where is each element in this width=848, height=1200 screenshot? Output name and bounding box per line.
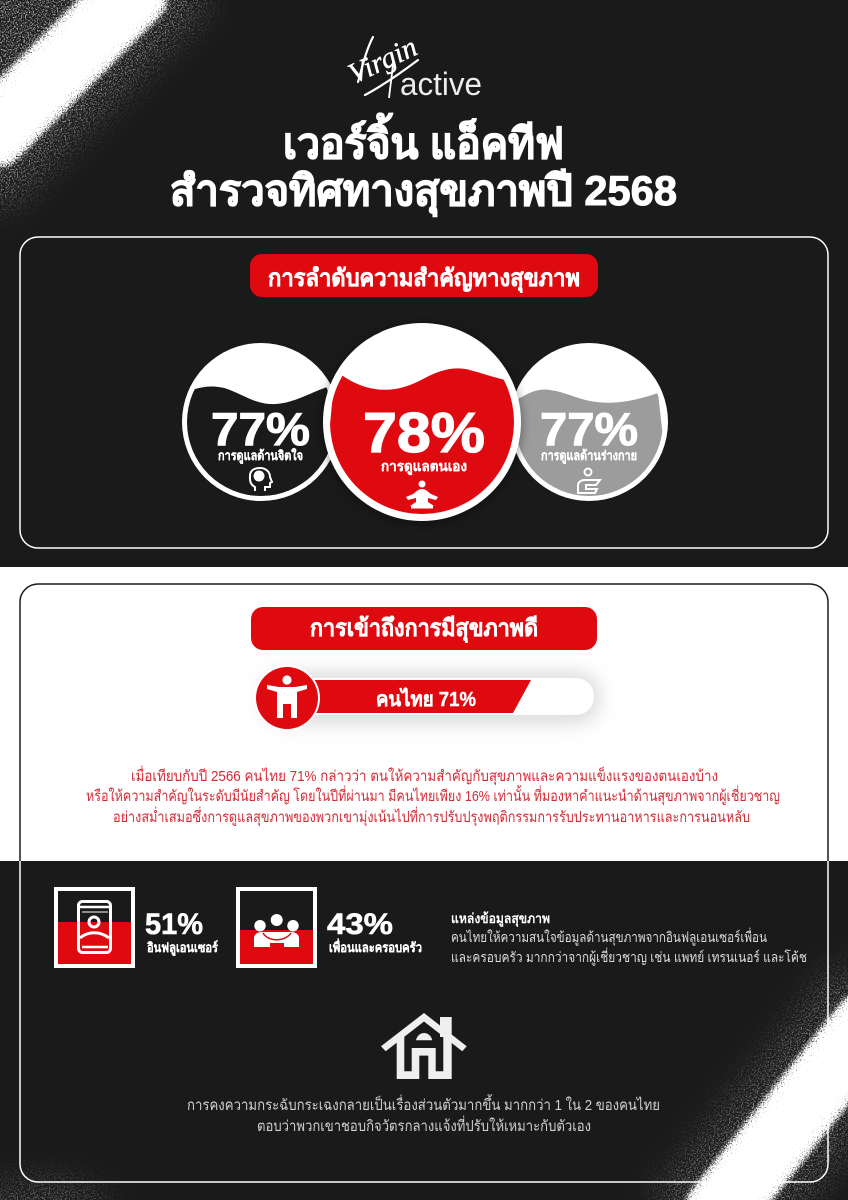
text block: outdoor routines: ตอบว่าพวกเขาชอบกิจวัตรกลางแจ้งที่ปรับให้เหมาะกับตัวเอง: [257, 1115, 591, 1135]
stat circle: mental care 77%: [182, 343, 330, 501]
logo: Virgin active: [343, 31, 482, 102]
title: สำรวจทิศทางสุขภาพปี 2568: [170, 167, 677, 217]
haze: grain around bottom right streak: [698, 1000, 848, 1200]
logo: Virgin active: Virgin: [343, 31, 422, 90]
panel: health priorities: [20, 237, 828, 548]
text block: health information sources: [451, 911, 807, 966]
white middle band: [0, 567, 848, 861]
text block: health information sources: คนไทยให้ความสนใจข้อมูลด้านสุขภาพจากอินฟลูเอนเซอร์เพื่อน: [451, 928, 767, 946]
stat circle: mental care 77%: การดูแลด้านจิตใจ: [218, 447, 303, 464]
heading pill: health priorities: การลำดับความสำคัญทางสุขภาพ: [268, 265, 580, 294]
text block: outdoor routines: การคงความกระฉับกระเฉงกลายเป็นเรื่องส่วนตัวมากขึ้น มากกว่า 1 ใน 2 ของคนไทย: [187, 1094, 660, 1114]
icon: house: [381, 1013, 467, 1079]
stat: influencers 51%: 51%: [145, 908, 203, 941]
stat circle: physical care 77%: [510, 343, 670, 501]
text block: 71% explanation: เมื่อเทียบกับปี 2566 คนไทย 71% กล่าวว่า ตนให้ความสำคัญกับสุขภาพและความแข็งแรงของตนเองบ้าง: [131, 765, 718, 786]
icon box: people: [238, 889, 315, 966]
stat: influencers 51%: [56, 889, 218, 966]
stat circle: physical care 77%: การดูแลด้านร่างกาย: [541, 448, 637, 464]
stat: friends and family 43%: เพื่อนและครอบครัว: [329, 938, 422, 955]
title: [170, 112, 677, 217]
stat circle: self care 78%: [320, 323, 530, 530]
text block: health information sources: แหล่งข้อมูลสุขภาพ: [451, 911, 550, 927]
text block: outdoor routines: [187, 1094, 660, 1135]
stat: friends and family 43%: [238, 889, 422, 966]
icon: person resting: [578, 468, 600, 493]
heading pill: access to good health: การเข้าถึงการมีสุขภาพดี: [310, 615, 538, 644]
stat circle: self care 78%: การดูแลตนเอง: [381, 458, 467, 475]
progress bar: Thai people 71%: [254, 665, 600, 731]
text block: 71% explanation: [86, 765, 780, 827]
title: เวอร์จิ้น แอ็คทีฟ: [283, 112, 564, 167]
haze: bottom left corner grain: [0, 1180, 110, 1200]
stat circle: physical care 77%: 77%: [540, 403, 638, 455]
icon: meditation: [406, 480, 438, 508]
light streak: top left corner: [0, 0, 147, 147]
heading pill: access to good health: [251, 607, 597, 650]
stat: influencers 51%: อินฟลูเอนเซอร์: [147, 940, 218, 956]
panel: access to good health: [20, 584, 828, 1182]
progress bar: Thai people 71%: คนไทย 71%: [376, 687, 476, 711]
stat: friends and family 43%: 43%: [327, 908, 393, 941]
logo: Virgin active: active: [400, 66, 482, 102]
stat circle: mental care 77%: 77%: [211, 403, 310, 455]
icon: head with brain: [250, 468, 272, 491]
text block: 71% explanation: อย่างสม่ำเสมอซึ่งการดูแลสุขภาพของพวกเขามุ่งเน้นไปที่การปรับปรุงพฤติกรรมการรับประทานอาหารและการนอนหลับ: [113, 806, 750, 827]
haze: grain around top left streak: [0, 0, 190, 190]
light streak: bottom right corner: [708, 1012, 848, 1200]
icon box: phone: [56, 889, 133, 966]
stat circle: self care 78%: 78%: [363, 401, 485, 465]
icon: person with open arms: [267, 675, 307, 718]
shadow behind centre circle: [322, 324, 522, 524]
heading pill: health priorities: [250, 254, 598, 297]
